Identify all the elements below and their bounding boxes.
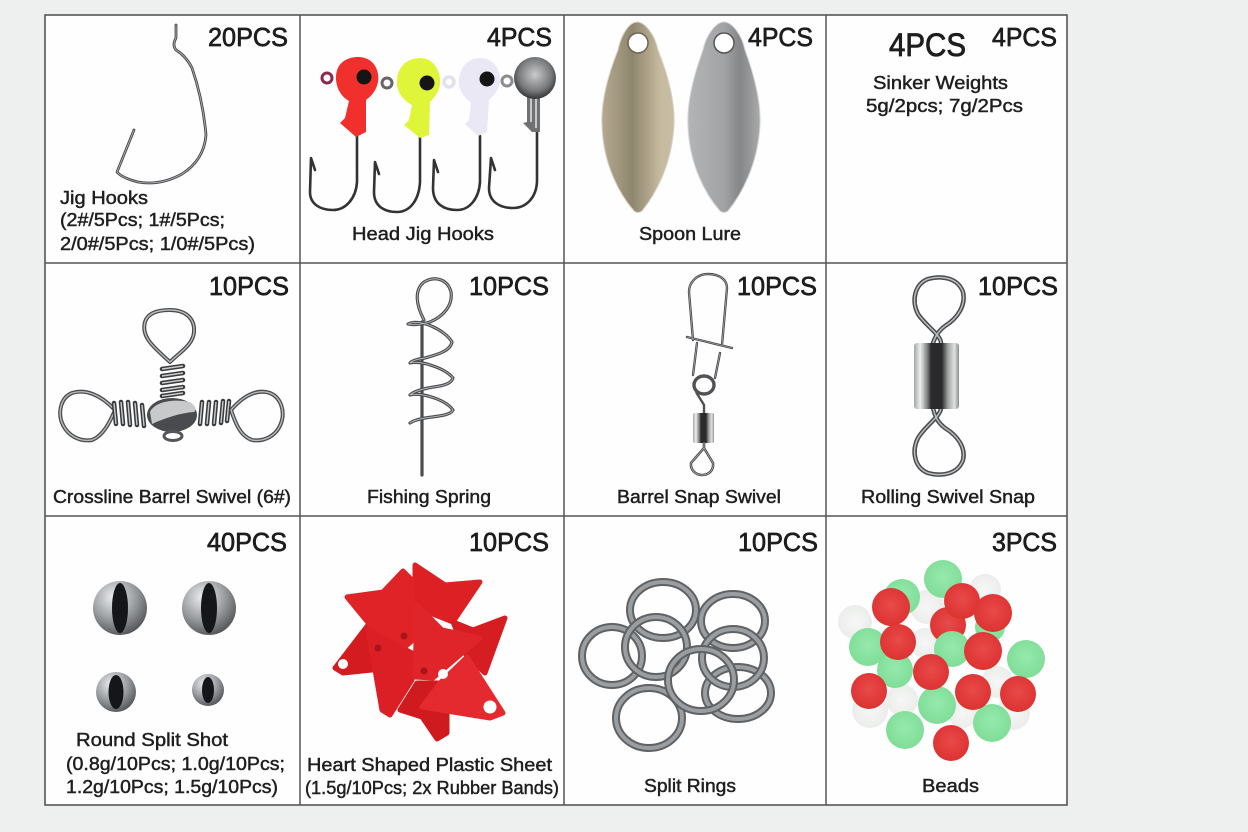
label <box>866 73 1023 116</box>
label: (2#/5Pcs; 1#/5Pcs; <box>60 210 225 230</box>
icon: split rings <box>582 582 771 748</box>
icon: spoons <box>602 22 760 212</box>
label <box>60 188 255 254</box>
label: 5g/2pcs; 7g/2Pcs <box>866 96 1023 116</box>
cell: crossline barrel swivel <box>53 271 291 507</box>
label <box>305 755 559 798</box>
label: Fishing Spring <box>367 487 491 507</box>
count: 10PCS <box>209 271 289 301</box>
cell: beads <box>838 527 1057 796</box>
count: 10PCS <box>738 527 818 557</box>
count: 4PCS <box>487 22 552 52</box>
label: Rolling Swivel Snap <box>861 487 1035 507</box>
label: Head Jig Hooks <box>352 224 494 244</box>
icon: red plastic sheets <box>335 565 505 739</box>
icon: snap swivel <box>687 274 732 475</box>
grid panel <box>45 15 1067 805</box>
label: 1.2g/10Pcs; 1.5g/10Pcs) <box>66 777 278 797</box>
cell: jig hooks <box>60 22 288 254</box>
label: Barrel Snap Swivel <box>617 487 781 507</box>
label: Beads <box>922 776 979 796</box>
cell: fishing spring <box>367 271 549 507</box>
cell: head jig hooks <box>310 22 556 244</box>
icon: beads <box>838 560 1045 761</box>
icon: split shots <box>93 581 236 712</box>
icon: jig heads <box>310 57 556 212</box>
label: Jig Hooks <box>60 188 148 208</box>
label: (1.5g/10Pcs; 2x Rubber Bands) <box>305 778 559 798</box>
count: 10PCS <box>978 271 1058 301</box>
icon: rolling swivel <box>914 277 964 475</box>
label: Spoon Lure <box>639 224 741 244</box>
cell: heart shaped plastic sheet <box>305 527 559 798</box>
label: Heart Shaped Plastic Sheet <box>307 755 552 775</box>
label: (0.8g/10Pcs; 1.0g/10Pcs; <box>66 754 285 774</box>
count: 10PCS <box>737 271 817 301</box>
label <box>66 730 285 797</box>
label: 2/0#/5Pcs; 1/0#/5Pcs) <box>60 234 255 254</box>
cell: split rings <box>582 527 818 796</box>
icon: jig hook <box>117 25 206 183</box>
count: 10PCS <box>469 271 549 301</box>
label: Sinker Weights <box>873 73 1008 93</box>
count: 4PCS <box>992 22 1057 52</box>
heading: 4PCS <box>889 27 966 63</box>
cell: spoon lure <box>602 22 813 244</box>
count: 3PCS <box>992 527 1057 557</box>
count: 20PCS <box>208 22 288 52</box>
count: 4PCS <box>748 22 813 52</box>
cell: barrel snap swivel <box>617 271 817 507</box>
label: Crossline Barrel Swivel (6#) <box>53 487 291 507</box>
cell: round split shot <box>66 527 287 797</box>
label: Split Rings <box>644 776 736 796</box>
label: Round Split Shot <box>76 730 228 750</box>
icon: spring <box>408 279 453 475</box>
count: 40PCS <box>207 527 287 557</box>
icon: crossline swivel <box>60 310 283 440</box>
cell: sinker weights <box>866 22 1057 116</box>
cell: rolling swivel snap <box>861 271 1058 507</box>
count: 10PCS <box>469 527 549 557</box>
